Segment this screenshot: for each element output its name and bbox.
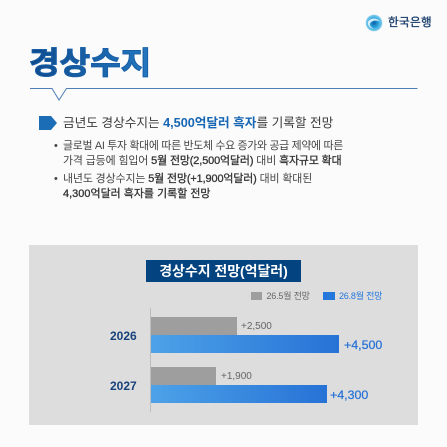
legend: August forecast: 26.8월 전망 [339, 291, 382, 301]
year group 2026 [110, 317, 382, 353]
bar: 2027 May [151, 367, 216, 385]
chart heading: 경상수지 전망(억달러) [159, 263, 288, 279]
chart heading [146, 260, 301, 282]
bar: 2026 May [151, 317, 237, 335]
value: +2,500: +2,500 [241, 321, 272, 332]
year group 2027 [110, 367, 368, 403]
year label 2026: 2026 [110, 328, 137, 342]
year label 2027: 2027 [110, 378, 137, 392]
legend: May forecast: 26.5월 전망 [266, 291, 310, 301]
value: +4,300: +4,300 [330, 388, 368, 402]
headline sentence: 금년도 경상수지는 4,500억달러 흑자를 기록할 전망 [63, 116, 333, 130]
value: +1,900: +1,900 [221, 371, 252, 382]
bullet text 2: 내년도 경상수지는 5월 전망(+1,900억달러) 대비 확대된 [63, 173, 312, 185]
logo wordmark: 한국은행 [388, 16, 432, 29]
panel: current account chart [29, 245, 418, 425]
icon: logo globe [366, 14, 382, 32]
bullet text 2: 4,300억달러 흑자를 기록할 전망 [63, 188, 210, 200]
bullet text 1: 글로벌 AI 투자 확대에 따른 반도체 수요 증가와 공급 제약에 따른 [63, 140, 343, 152]
bar: 2027 August [151, 385, 327, 403]
logo: Bank of Korea [366, 14, 432, 32]
value: +4,500: +4,500 [344, 338, 382, 352]
bullet text 2 [54, 172, 312, 200]
bullet text 1: • [54, 140, 58, 152]
bullet text 1 [54, 140, 343, 167]
arrow bullet icon [39, 116, 57, 130]
bullet text 2: • [54, 173, 58, 185]
bar: 2026 August [151, 335, 339, 353]
title: 경상수지 [29, 46, 151, 81]
bullet text 1: 가격 급등에 힘입어 5월 전망(2,500억달러) 대비 흑자규모 확대 [63, 154, 342, 166]
title rule with notch [30, 88, 418, 101]
axis line [150, 308, 151, 412]
